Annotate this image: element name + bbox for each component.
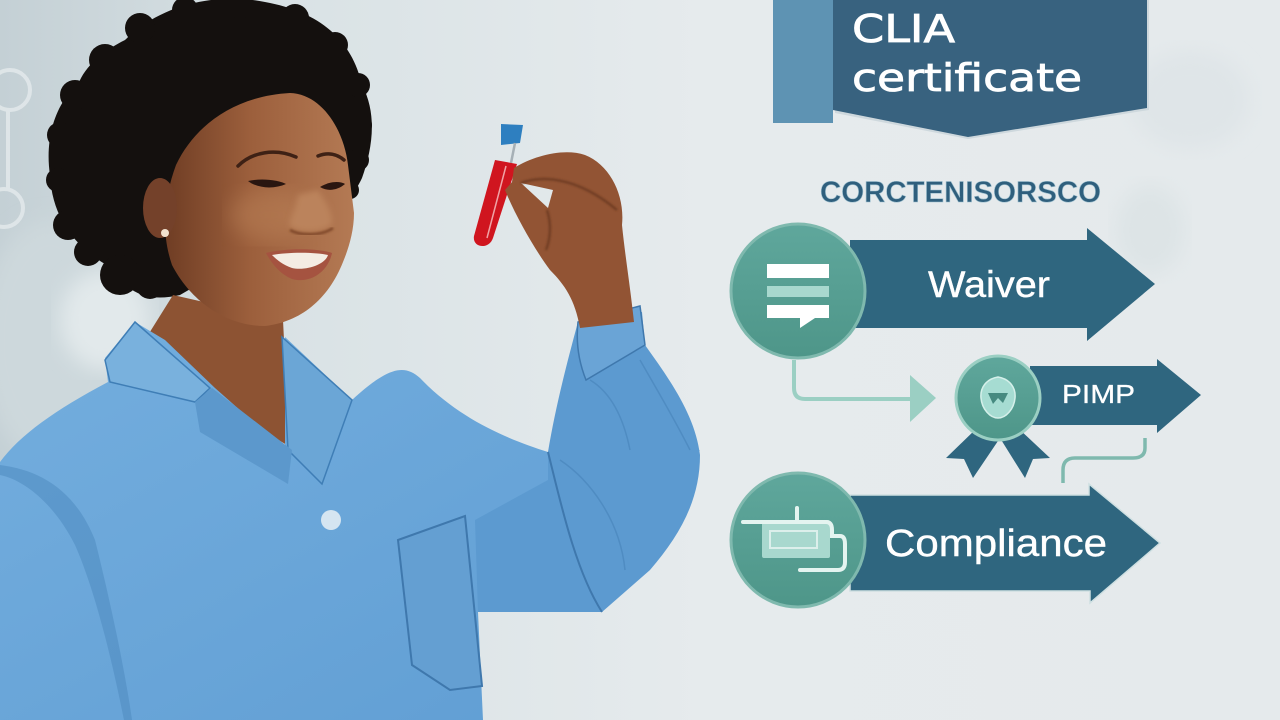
compliance arrow: [731, 473, 1160, 607]
person: [0, 0, 700, 720]
coat pocket: [398, 516, 482, 690]
waiver label: Waiver: [928, 264, 1050, 305]
connector arrow to PMP: [794, 360, 936, 422]
connector curve: [1063, 438, 1145, 483]
PMP arrow: [946, 356, 1201, 478]
face: [165, 93, 354, 326]
subheading: CORCTENISORSCO: [820, 176, 1101, 209]
molecule outline at left edge: [0, 70, 30, 227]
coat button: [321, 510, 341, 530]
smile: [266, 249, 332, 280]
waiver icon circle: [731, 224, 865, 358]
PMP label: PIMP: [1062, 379, 1135, 409]
earring: [161, 229, 169, 237]
title banner: certificate: [852, 56, 1082, 100]
nose: [290, 190, 333, 234]
cheek highlight: [230, 189, 310, 241]
test tube: [474, 124, 523, 246]
eyebrows: [238, 152, 344, 166]
ribbon: [946, 428, 1050, 478]
collar: [105, 322, 352, 484]
lab coat body: [0, 322, 700, 720]
neck: [148, 295, 295, 450]
cuff: [577, 306, 645, 380]
title text: CLIA: [852, 7, 955, 51]
PMP badge: [956, 356, 1040, 440]
compliance icon circle: [731, 473, 865, 607]
eyes: [248, 180, 345, 190]
title banner: [773, 0, 1149, 139]
hair: [46, 0, 372, 299]
sleeve: [475, 312, 700, 612]
waiver arrow: [731, 224, 1155, 358]
compliance label: Compliance: [885, 523, 1107, 565]
left coat shadow fold: [0, 465, 132, 720]
hand: [505, 152, 634, 328]
ear: [143, 178, 177, 238]
